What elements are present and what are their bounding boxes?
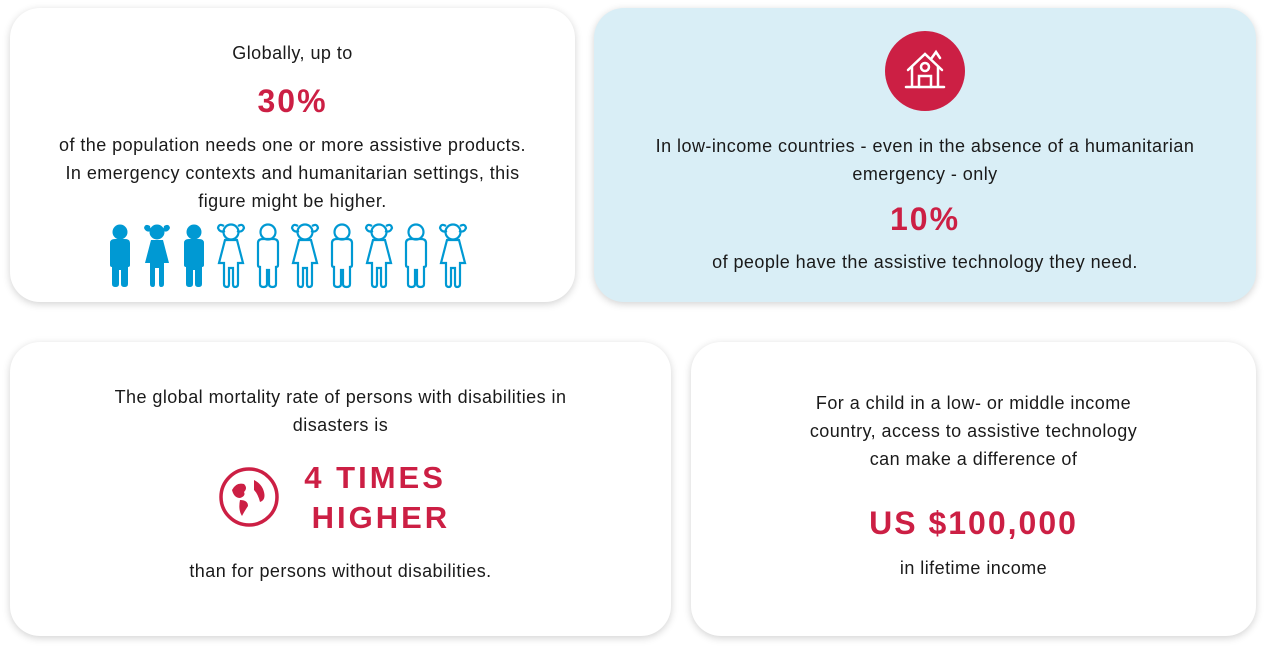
panel: mortality [10, 342, 671, 636]
text: intro: The global mortality rate of persons with disabilities in [115, 387, 566, 407]
icon: house [885, 31, 965, 111]
stat: 4 times higher [304, 460, 450, 535]
text: intro: disasters is [293, 415, 388, 435]
text: intro [115, 387, 566, 435]
icon: globe [219, 467, 279, 527]
text: intro [810, 393, 1137, 469]
stat: 4 times higher: HIGHER [312, 500, 450, 535]
stat: 10%: 10% [890, 201, 960, 237]
text: tail: than for persons without disabilities. [189, 561, 492, 581]
text: intro: country, access to assistive technology [810, 421, 1137, 441]
panel: lifetime income [691, 342, 1256, 636]
text: intro: Globally, up to [232, 43, 353, 63]
panel: 10% low-income [594, 8, 1256, 302]
text: description: In emergency contexts and humanitarian settings, this [65, 163, 520, 183]
stat: 30%: 30% [257, 83, 328, 119]
text: description: of the population needs one or more assistive products. [59, 135, 526, 155]
panel: 30% population [10, 8, 575, 302]
text: description: In low-income countries - even in the absence of a humanitarian [656, 136, 1194, 156]
stat: US $100,000: US $100,000 [869, 505, 1078, 541]
icon row: people [110, 223, 468, 288]
text: description [59, 135, 526, 211]
text: tail: in lifetime income [900, 558, 1047, 578]
text: intro: For a child in a low- or middle income [816, 393, 1131, 413]
text: description [656, 136, 1194, 184]
text: description: figure might be higher. [198, 191, 387, 211]
text: tail: of people have the assistive technology they need. [712, 252, 1138, 272]
stat: 4 times higher: 4 TIMES [304, 460, 446, 495]
text: intro: can make a difference of [870, 449, 1077, 469]
text: description: emergency - only [852, 164, 998, 184]
